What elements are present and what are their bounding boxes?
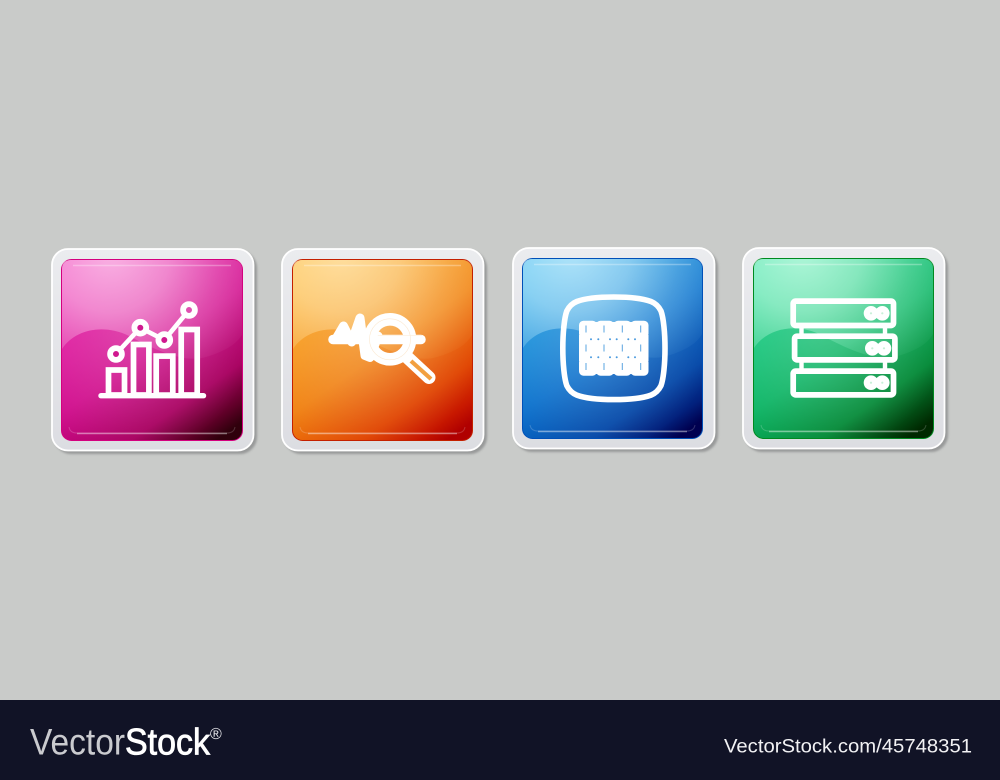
button frame (52, 249, 257, 454)
image id text: VectorStock.com/45748351 (724, 736, 972, 758)
logo: VectorStock: Stock (125, 722, 210, 762)
icon: bar chart with trend line (101, 304, 204, 396)
logo: VectorStock: ® (210, 726, 222, 743)
button frame (282, 249, 487, 454)
panel: blue binary chip button (513, 248, 718, 452)
panel: orange seismic search button (282, 249, 487, 454)
panel: green server rack button (743, 248, 948, 452)
icon: rounded chip with binary digits (563, 297, 665, 400)
logo: VectorStock: Vector (30, 722, 125, 762)
button face (754, 258, 934, 438)
icon: stacked servers (793, 301, 895, 395)
panel: magenta chart button (52, 249, 257, 454)
button face (522, 258, 702, 438)
button face (292, 260, 472, 440)
button frame (743, 248, 948, 452)
button face (62, 260, 242, 440)
logo: VectorStock (30, 722, 222, 762)
icon: magnifier over seismic wave (333, 318, 431, 379)
footer bar (0, 700, 1000, 780)
button frame (513, 248, 718, 452)
